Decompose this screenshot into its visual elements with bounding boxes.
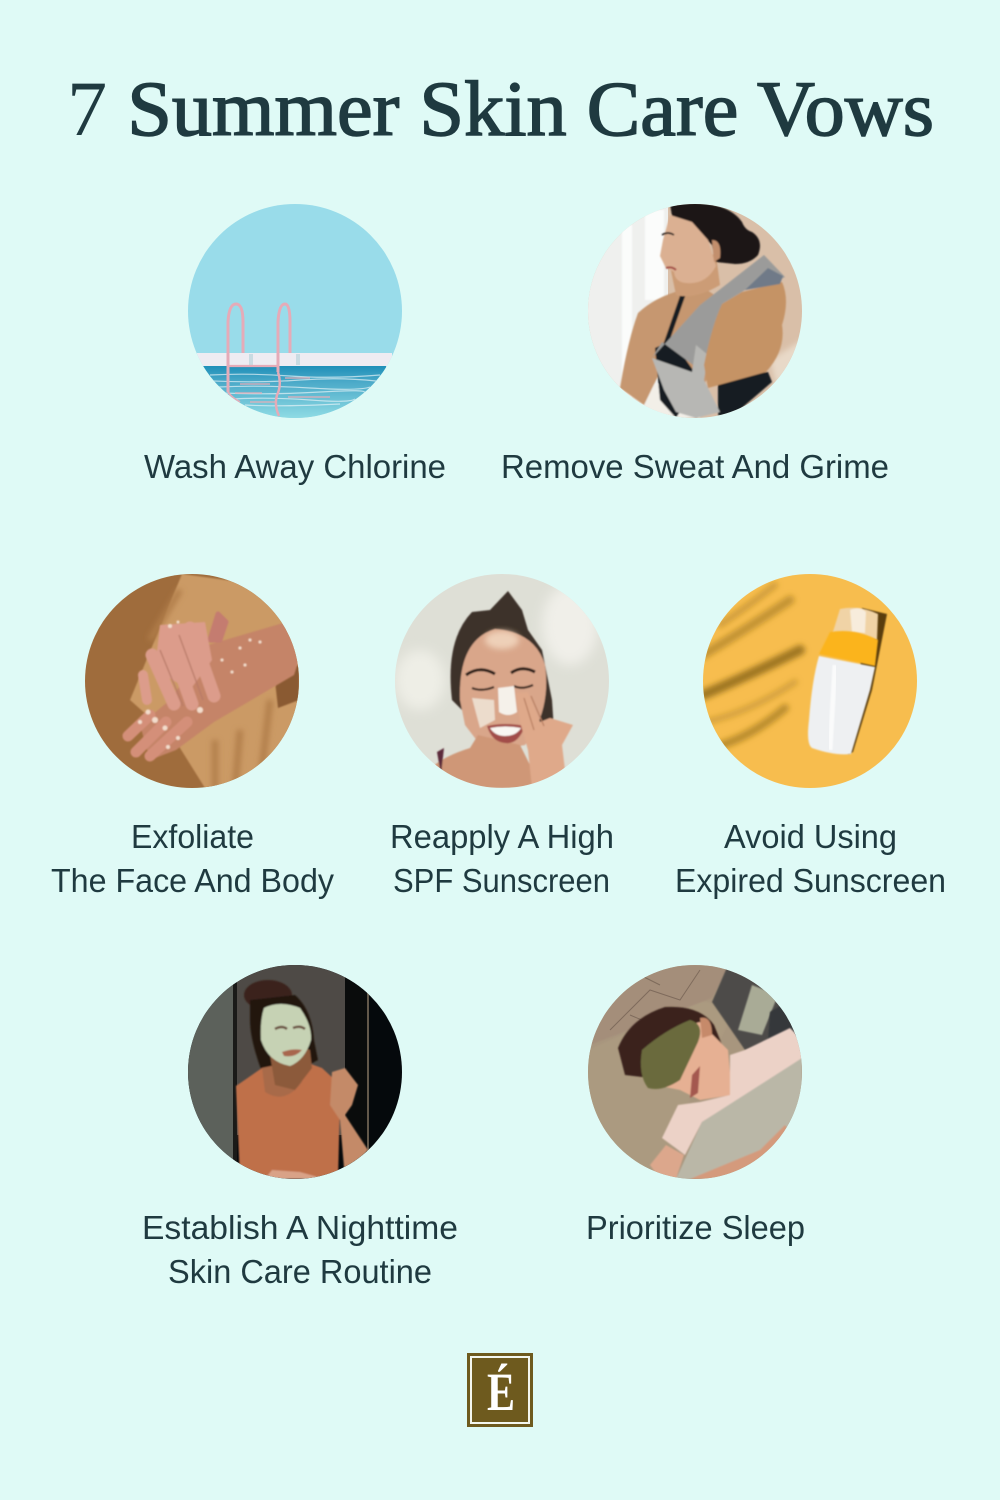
label: Prioritize Sleep	[586, 1209, 805, 1246]
vow 4: reapply sunscreen	[390, 574, 614, 899]
label: SPF Sunscreen	[393, 862, 610, 899]
photo: sunscreen bottle	[703, 574, 917, 788]
vow 1: wash away chlorine	[144, 204, 446, 485]
photo: woman sleeping with eye mask	[588, 965, 802, 1179]
label: Expired Sunscreen	[675, 862, 946, 899]
label: Skin Care Routine	[168, 1253, 432, 1290]
label: Exfoliate	[131, 818, 254, 855]
photo: smiling woman applying cream	[395, 574, 609, 788]
label	[51, 818, 334, 899]
vow 5: avoid expired sunscreen	[675, 574, 946, 899]
label: Remove Sweat And Grime	[501, 448, 889, 485]
label	[675, 818, 946, 899]
label	[142, 1209, 458, 1290]
photo: pool ladder	[188, 204, 402, 418]
label: Establish A Nighttime	[142, 1209, 458, 1246]
vow 7: prioritize sleep	[586, 965, 805, 1246]
photo: scrubbing hands	[85, 574, 299, 790]
logo	[467, 1353, 533, 1427]
photo: woman with towel	[588, 203, 802, 418]
label: The Face And Body	[51, 862, 334, 899]
vow 6: nighttime routine	[142, 965, 458, 1290]
vow 3: exfoliate	[51, 574, 334, 899]
label	[390, 818, 614, 899]
title: 7 Summer Skin Care Vows	[67, 65, 934, 152]
label: Wash Away Chlorine	[144, 448, 446, 485]
logo: É	[487, 1362, 515, 1422]
vow 2: remove sweat and grime	[501, 203, 889, 485]
label: Reapply A High	[390, 818, 614, 855]
label: Avoid Using	[724, 818, 897, 855]
photo: woman in face mask at mirror	[188, 965, 402, 1179]
